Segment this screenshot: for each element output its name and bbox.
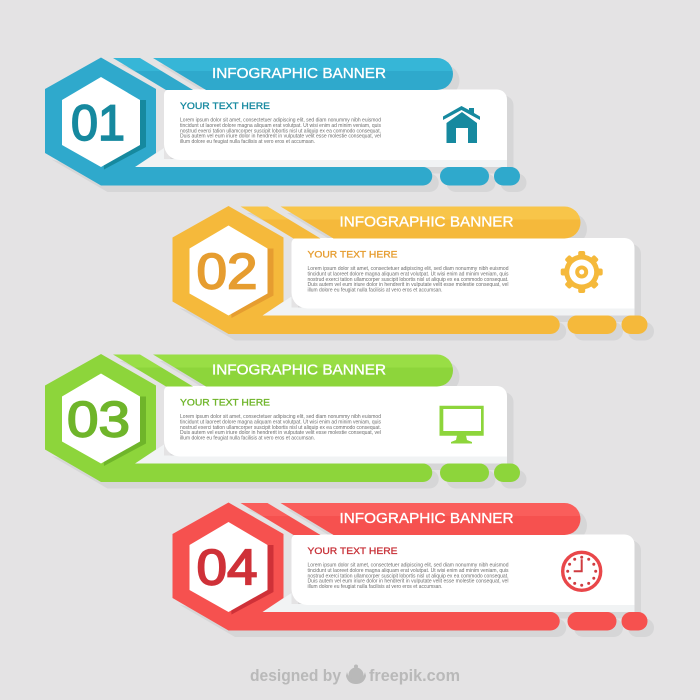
credit text: freepik.com: freepik.com <box>369 667 460 685</box>
banner title: INFOGRAPHIC BANNER <box>212 66 386 82</box>
body text: Duis autem vel eum iriure dolor in hendrerit in vulputate velit esse molestie consequat, vel <box>308 282 508 288</box>
body text <box>180 414 381 441</box>
drop shadow <box>52 64 526 192</box>
banner 2: yellow <box>172 206 654 340</box>
heading strips <box>113 58 453 90</box>
number: 04 <box>196 540 258 596</box>
number hexagon <box>62 374 146 466</box>
number hexagon <box>62 77 146 170</box>
drop shadow <box>179 213 654 340</box>
body text: Lorem ipsum dolor sit amet, consectetuer adipiscing elit, sed diam nonummy nibh euismod <box>308 266 509 272</box>
body text: nostrud exerci tation ullamcorper suscipit lobortis nisl ut aliquip ex ea commodo consequat. <box>308 573 508 579</box>
body text <box>308 562 509 590</box>
end pills <box>440 167 520 186</box>
banner 1: blue <box>45 58 526 192</box>
body text: illum dolore eu feugiat nulla facilisis at vero eros et accumsan. <box>180 435 315 441</box>
number hexagon <box>190 226 274 318</box>
white text panel <box>135 90 507 167</box>
icon: house <box>443 106 480 143</box>
subheading: YOUR TEXT HERE <box>308 545 398 556</box>
body text: Lorem ipsum dolor sit amet, consectetuer adipiscing elit, sed diam nonummy nibh euismod <box>180 414 381 420</box>
body text: illum dolore eu feugiat nulla facilisis at vero eros et accumsan. <box>180 139 315 145</box>
credit text: designed by: designed by <box>250 667 342 685</box>
footer credit <box>250 664 460 685</box>
hexagon frame and bottom bar <box>45 354 432 482</box>
subheading: YOUR TEXT HERE <box>180 100 270 111</box>
heading strips <box>240 206 580 238</box>
end pills <box>440 464 520 482</box>
icon: clock <box>563 552 601 590</box>
subheading: YOUR TEXT HERE <box>308 248 398 260</box>
icon: monitor <box>440 406 484 444</box>
icon: freepik mascot <box>346 664 366 684</box>
body text: Duis autem vel eum iriure dolor in hendrerit in vulputate velit esse molestie consequat, vel <box>180 134 381 140</box>
banner title: INFOGRAPHIC BANNER <box>212 362 386 378</box>
banner title: INFOGRAPHIC BANNER <box>340 511 514 527</box>
body text <box>308 266 509 293</box>
hexagon frame and bottom bar <box>45 58 432 186</box>
body text: illum dolore eu feugiat nulla facilisis at vero eros et accumsan. <box>308 584 442 590</box>
number: 01 <box>71 95 125 151</box>
body text <box>180 118 381 145</box>
body text: nostrud exerci tation ullamcorper suscipit lobortis nisl ut aliquip ex ea commodo consequat. <box>308 277 508 283</box>
body text: tincidunt ut laoreet dolore magna aliquam erat volutpat. Ut wisi enim ad minim veniam, quis <box>180 420 381 426</box>
body text: tincidunt ut laoreet dolore magna aliquam erat volutpat. Ut wisi enim ad minim veniam, quis <box>308 568 509 574</box>
heading strips <box>113 354 453 386</box>
hexagon frame and bottom bar <box>172 502 560 630</box>
white text panel <box>262 238 634 316</box>
drop shadow <box>179 510 654 637</box>
white text panel <box>135 386 507 464</box>
banner 4: red <box>172 502 654 637</box>
body text: tincidunt ut laoreet dolore magna aliquam erat volutpat. Ut wisi enim ad minim veniam, quis <box>180 123 381 129</box>
body text: Lorem ipsum dolor sit amet, consectetuer adipiscing elit, sed diam nonummy nibh euismod <box>180 118 381 124</box>
hexagon frame and bottom bar <box>172 206 560 334</box>
end pills <box>568 612 648 630</box>
banner title: INFOGRAPHIC BANNER <box>340 214 514 230</box>
body text: tincidunt ut laoreet dolore magna aliquam erat volutpat. Ut wisi enim ad minim veniam, quis <box>308 272 509 278</box>
icon: gear <box>561 251 603 293</box>
banner 3: green <box>45 354 526 488</box>
heading strips <box>240 503 580 535</box>
drop shadow <box>52 361 526 488</box>
subheading: YOUR TEXT HERE <box>180 396 270 408</box>
body text: illum dolore eu feugiat nulla facilisis at vero eros et accumsan. <box>308 287 442 293</box>
number hexagon <box>190 522 274 614</box>
body text: nostrud exerci tation ullamcorper suscipit lobortis nisl ut aliquip ex ea commodo consequat. <box>180 425 381 431</box>
number: 02 <box>196 244 258 300</box>
body text: Duis autem vel eum iriure dolor in hendrerit in vulputate velit esse molestie consequat, vel <box>180 430 381 436</box>
body text: nostrud exerci tation ullamcorper suscipit lobortis nisl ut aliquip ex ea commodo consequat. <box>180 128 381 134</box>
white text panel <box>262 534 634 612</box>
body text: Duis autem vel eum iriure dolor in hendrerit in vulputate velit esse molestie consequat, vel <box>308 578 508 584</box>
number: 03 <box>67 392 130 448</box>
end pills <box>568 316 648 334</box>
body text: Lorem ipsum dolor sit amet, consectetuer adipiscing elit, sed diam nonummy nibh euismod <box>308 562 509 568</box>
